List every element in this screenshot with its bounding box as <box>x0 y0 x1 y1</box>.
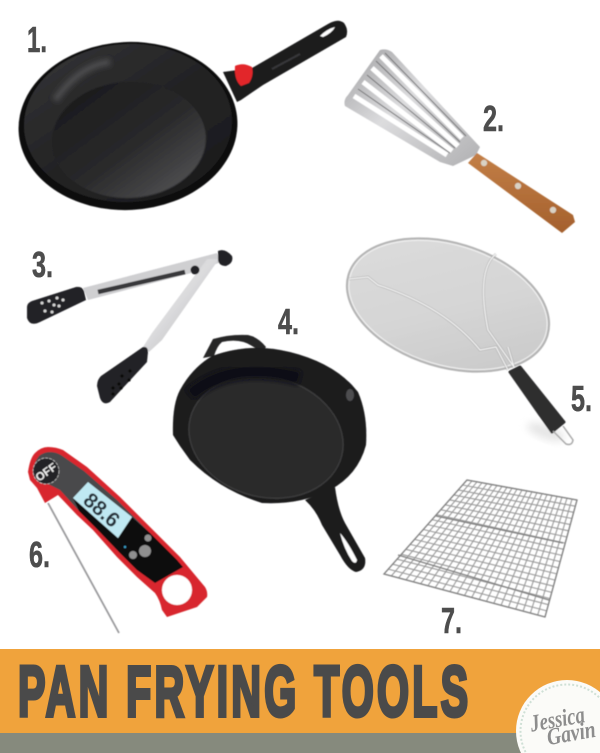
cooling rack <box>384 480 577 617</box>
number 4: 4. <box>278 301 299 342</box>
fish spatula <box>344 49 575 233</box>
gray footer strip <box>0 733 600 753</box>
off button label: OFF <box>34 461 59 484</box>
number 1: 1. <box>27 19 47 60</box>
number 2: 2. <box>483 98 504 139</box>
orange title band <box>0 649 600 733</box>
cast iron skillet <box>173 335 366 572</box>
instant read thermometer <box>28 447 207 633</box>
silicone tongs <box>27 250 232 403</box>
logo badge <box>516 680 600 753</box>
lcd reading: 88.6 <box>79 489 124 532</box>
title: PAN FRYING TOOLS <box>18 652 468 732</box>
number 3: 3. <box>32 244 53 285</box>
number 7: 7. <box>441 600 462 641</box>
number 6: 6. <box>29 534 50 575</box>
frying pan with detachable handle <box>14 21 347 216</box>
splatter screen <box>330 215 573 445</box>
